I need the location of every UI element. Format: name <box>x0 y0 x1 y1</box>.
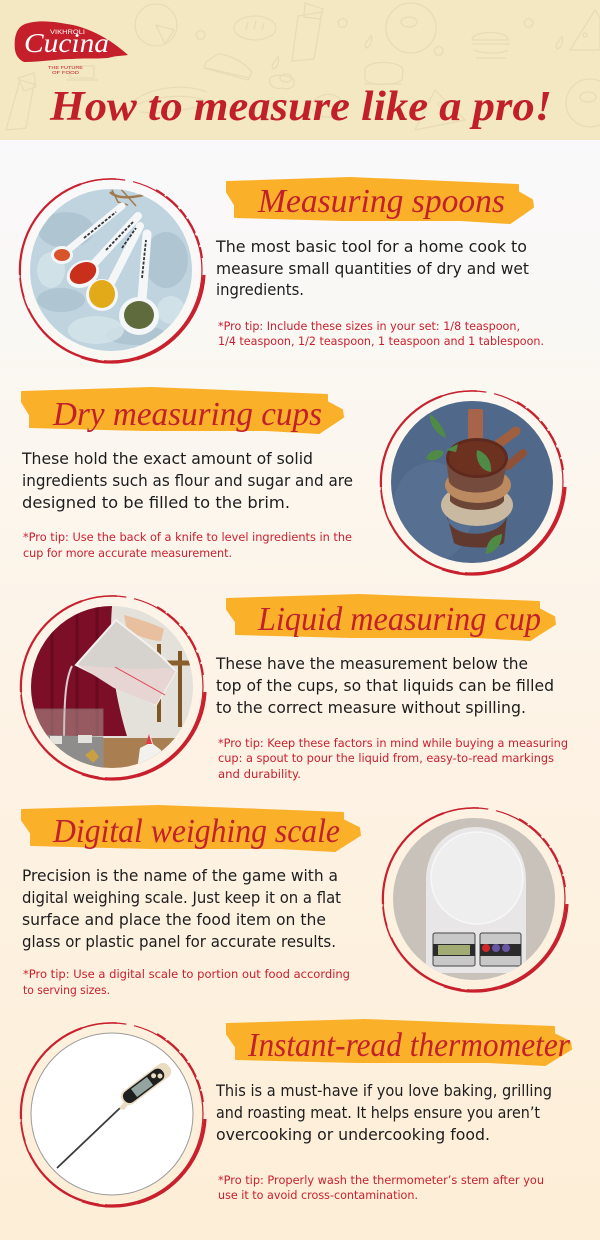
brush heading: measuring spoons: Measuring spoons <box>257 183 505 220</box>
body text: instant-read thermometer: This is a must-have if you love baking, grilling <box>215 1081 552 1100</box>
pro tip: instant-read thermometer: use it to avoid cross-contamination. <box>218 1188 418 1202</box>
body text: measuring spoons: ingredients. <box>216 280 304 299</box>
photo: stacked measuring cups in ring <box>381 391 565 574</box>
pro tip: digital weighing scale: to serving sizes. <box>23 983 110 997</box>
logo: Vikhroli Cucina: OF FOOD <box>52 70 80 75</box>
pro tip: instant-read thermometer: *Pro tip: Properly wash the thermometer’s stem after you <box>218 1173 544 1187</box>
pro tip: liquid measuring cup: *Pro tip: Keep these factors in mind while buying a measuring <box>218 736 568 750</box>
brush heading: dry measuring cups: Dry measuring cups <box>52 396 322 433</box>
body text: instant-read thermometer <box>215 1081 552 1144</box>
body text: measuring spoons <box>215 237 529 299</box>
pro tip: measuring spoons <box>218 319 544 348</box>
panel: measuring spoons <box>20 178 544 362</box>
logo: Vikhroli Cucina: VIKHROLI <box>50 29 85 36</box>
pro tip: measuring spoons: 1/4 teaspoon, 1/2 teaspoon, 1 teaspoon and 1 tablespoon. <box>218 334 544 348</box>
body text: dry measuring cups: designed to be filled to the brim. <box>22 493 290 512</box>
photo: digital scale in ring <box>383 808 567 991</box>
body text: liquid measuring cup <box>215 654 554 717</box>
body text: digital weighing scale: surface and place the food item on the <box>22 910 326 929</box>
pro tip: dry measuring cups <box>23 530 352 560</box>
panel: liquid measuring cup <box>21 595 568 781</box>
pro tip: liquid measuring cup <box>218 736 568 781</box>
body text: digital weighing scale: digital weighing scale. Just keep it on a flat <box>22 888 341 907</box>
logo: Vikhroli Cucina: Cucina <box>24 28 109 58</box>
pro tip: dry measuring cups: *Pro tip: Use the back of a knife to level ingredients in the <box>23 530 352 544</box>
body text: measuring spoons: measure small quantities of dry and wet <box>216 259 529 278</box>
logo: Vikhroli Cucina <box>15 21 128 75</box>
pro tip: instant-read thermometer <box>218 1173 544 1202</box>
food doodle pattern <box>6 3 600 130</box>
photo: thermometer in ring <box>21 1023 205 1206</box>
panel: dry measuring cups <box>21 388 565 574</box>
pro tip: measuring spoons: *Pro tip: Include these sizes in your set: 1/8 teaspoon, <box>218 319 520 333</box>
logo: Vikhroli Cucina: THE FUTURE <box>48 65 83 70</box>
pro tip: digital weighing scale <box>23 967 350 997</box>
body text: measuring spoons: The most basic tool for a home cook to <box>215 237 527 256</box>
photo: spoons in ring <box>20 179 204 362</box>
brush heading: digital weighing scale: Digital weighing scale <box>52 813 340 850</box>
brush heading: measuring spoons <box>227 178 533 223</box>
title: How to measure like a pro! <box>49 84 552 130</box>
body text: instant-read thermometer: overcooking or undercooking food. <box>216 1125 490 1144</box>
pro tip: digital weighing scale: *Pro tip: Use a digital scale to portion out food according <box>23 967 350 981</box>
body text: dry measuring cups: These hold the exact amount of solid <box>21 449 313 468</box>
body text: digital weighing scale: Precision is the name of the game with a <box>22 866 338 885</box>
body text: digital weighing scale: glass or plastic panel for accurate results. <box>22 932 336 951</box>
body text: instant-read thermometer: and roasting meat. It helps ensure you aren’t <box>216 1103 540 1122</box>
body text: liquid measuring cup: top of the cups, so that liquids can be filled <box>216 676 554 695</box>
pro tip: dry measuring cups: cup for more accurate measurement. <box>23 546 232 560</box>
body text: liquid measuring cup: to the correct measure without spilling. <box>216 698 526 717</box>
brush heading: instant-read thermometer: Instant-read thermometer <box>247 1027 571 1064</box>
pro tip: liquid measuring cup: and durability. <box>218 767 301 781</box>
body text: dry measuring cups: ingredients such as flour and sugar and are <box>22 471 353 490</box>
header band <box>0 0 600 140</box>
panel: instant-read thermometer <box>21 1020 571 1206</box>
body text: digital weighing scale <box>22 866 341 951</box>
body text: liquid measuring cup: These have the measurement below the <box>215 654 528 673</box>
body text: dry measuring cups <box>21 449 353 512</box>
photo: pouring measuring cup in ring <box>21 596 205 779</box>
brush heading: liquid measuring cup: Liquid measuring cup <box>257 601 541 638</box>
panel: digital weighing scale <box>22 806 567 997</box>
pro tip: liquid measuring cup: cup: a spout to pour the liquid from, easy-to-read markings <box>218 751 554 765</box>
